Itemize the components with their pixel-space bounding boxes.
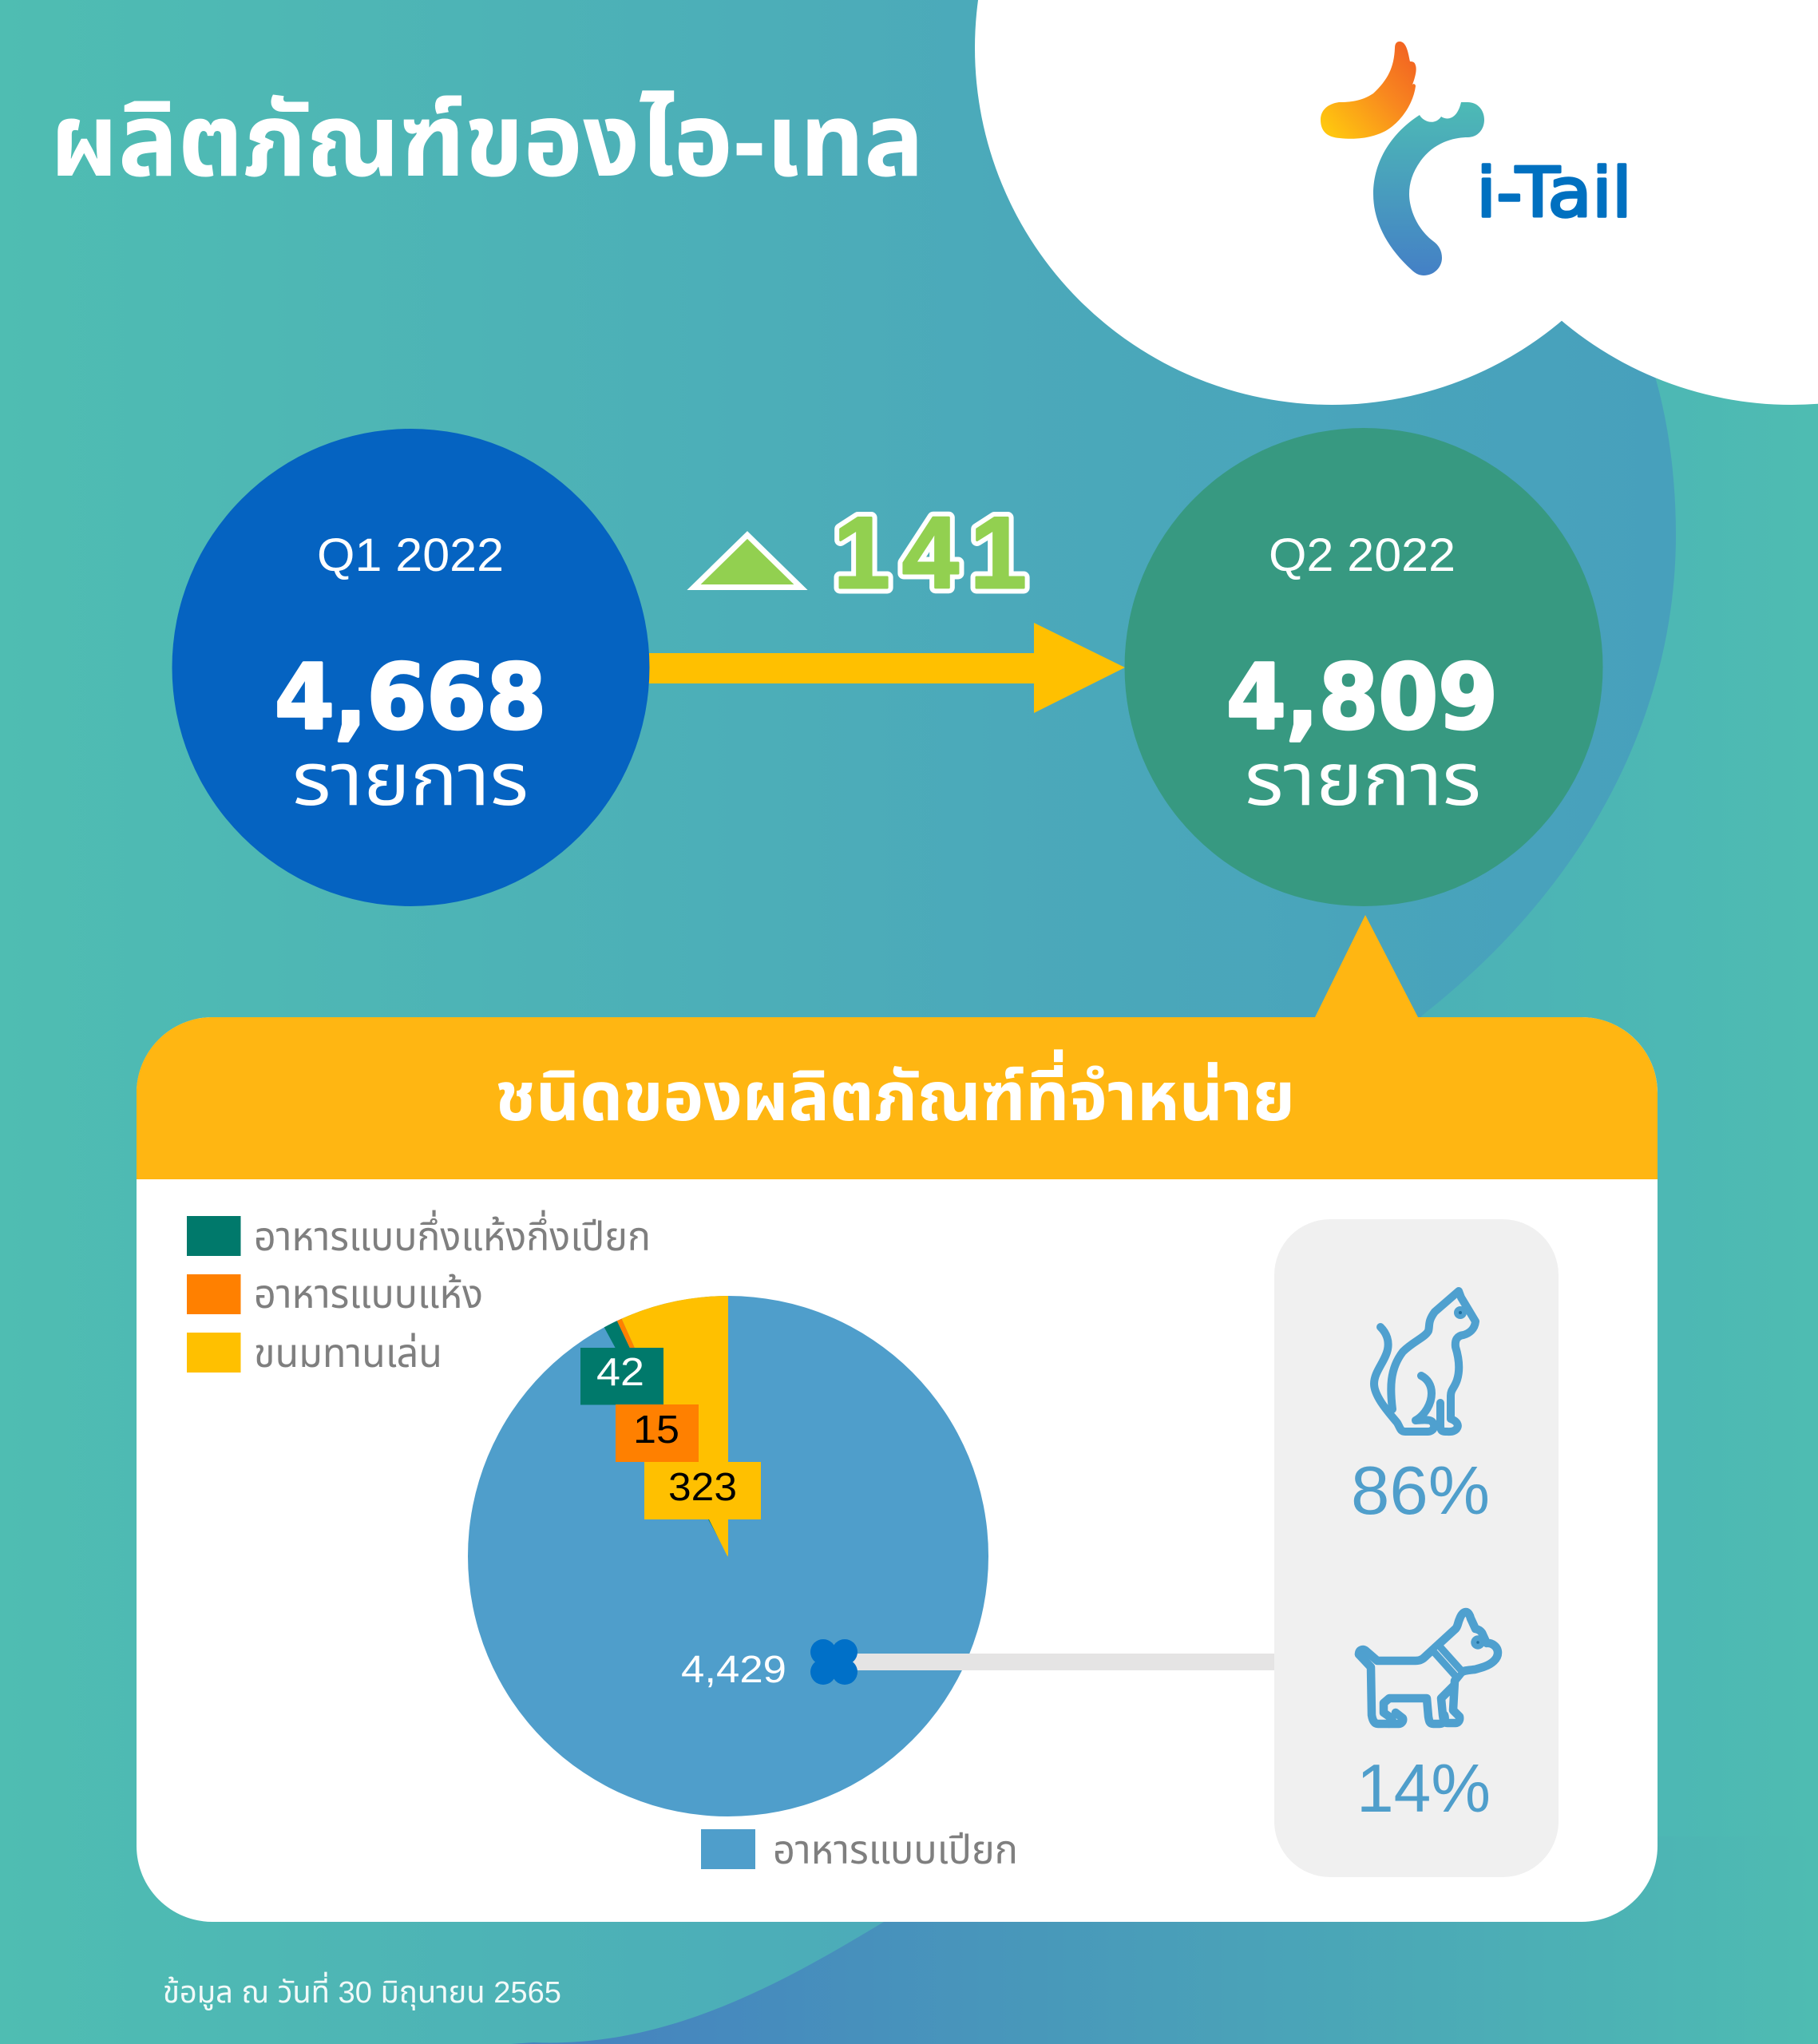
logo wordmark: i-Tail xyxy=(1476,153,1632,233)
icon: up triangle xyxy=(694,535,801,588)
swatch treats xyxy=(187,1333,241,1373)
swatch dry xyxy=(187,1274,241,1314)
Q2 unit: รายการ xyxy=(1245,739,1481,821)
panel: product types xyxy=(137,915,1658,1922)
circle: Q2 2022 xyxy=(1124,428,1603,906)
callout 323 xyxy=(644,1462,761,1557)
callout 42: 42 xyxy=(596,1351,644,1394)
arrow: Q1 to Q2 xyxy=(647,623,1125,713)
increase value: 141 xyxy=(834,496,1027,609)
Q2 value: 4,809 xyxy=(1226,646,1498,750)
logo wing xyxy=(1321,42,1416,139)
circle: Q1 2022 xyxy=(172,429,650,906)
callout 15: 15 xyxy=(633,1408,679,1452)
increase value: 141 xyxy=(834,496,1027,609)
callout 42 xyxy=(580,1348,663,1405)
wet food value: 4,429 xyxy=(681,1649,786,1691)
icon: cat xyxy=(1374,1291,1475,1432)
dog share: 14% xyxy=(1357,1751,1491,1827)
connector dot xyxy=(810,1639,858,1685)
panel header xyxy=(137,915,1658,1179)
callout 323: 323 xyxy=(668,1466,737,1509)
connector line xyxy=(846,1654,1275,1670)
legend dry: อาหารแบบแห้ง xyxy=(254,1272,483,1317)
logo: i-Tail xyxy=(1321,42,1632,275)
Q2 label: Q2 2022 xyxy=(1269,529,1456,581)
footnote: ข้อมูล ณ วันที่ 30 มิถุนายน 2565 xyxy=(163,1971,561,2010)
callout 15 xyxy=(616,1404,699,1462)
legend semi-moist: อาหารแบบกึ่งแห้งกึ่งเปียก xyxy=(254,1210,651,1259)
legend: top xyxy=(187,1210,651,1376)
legend treats: ขนมทานเล่น xyxy=(254,1331,442,1376)
icon: dog xyxy=(1359,1612,1498,1724)
panel: cat and dog share xyxy=(1274,1219,1559,1877)
cat share: 86% xyxy=(1351,1453,1490,1529)
swatch semi-moist xyxy=(187,1216,241,1256)
Q1 value: 4,668 xyxy=(275,646,546,750)
pie chart xyxy=(468,1296,1275,1816)
white cloud corner xyxy=(975,0,1818,405)
Q1 label: Q1 2022 xyxy=(317,529,504,581)
Q1 unit: รายการ xyxy=(292,739,529,821)
title: ผลิตภัณฑ์ของไอ-เทล xyxy=(50,84,924,198)
panel heading: ชนิดของผลิตภัณฑ์ที่จำหน่าย xyxy=(495,1049,1295,1135)
logo tail xyxy=(1373,102,1484,275)
legend: wet food: อาหารแบบเปียก xyxy=(773,1828,1018,1872)
